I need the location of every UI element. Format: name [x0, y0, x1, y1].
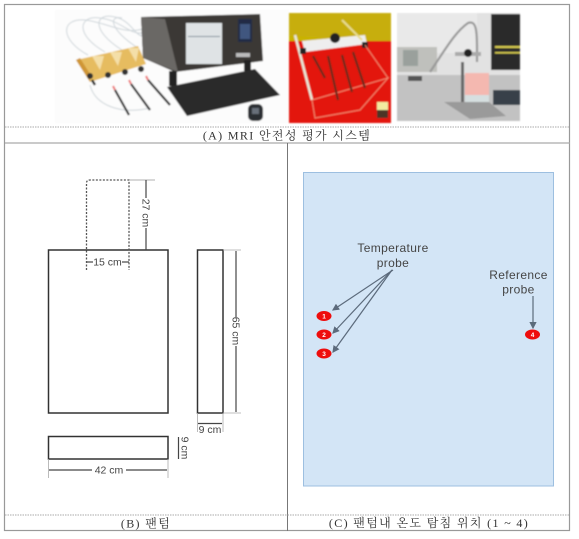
panel: phantom dimensions: [48, 180, 242, 478]
base: [444, 102, 506, 119]
gooseneck arm: [430, 22, 477, 72]
frame rails: [302, 35, 367, 52]
photo: phantom frame on red background: [289, 13, 391, 123]
caption A: (A) MRI 안전성 평가 시스템: [203, 128, 371, 142]
label: temperature probe: probe: [377, 256, 409, 270]
label: reference probe: probe: [502, 282, 535, 296]
marker 2: 2: [322, 332, 326, 339]
marker 4: [525, 330, 540, 340]
photo: MRI safety measurement console with probes: [55, 10, 289, 123]
panel: probe positions: [304, 172, 554, 486]
photo: probe stand with pink phantom beaker: [397, 13, 520, 121]
marker 1: [316, 311, 332, 321]
dimension 27 cm: [140, 180, 152, 250]
dimension 9 cm side: 9 cm: [199, 424, 222, 436]
caption B: (B) 팬텀: [121, 516, 171, 530]
marker 1: 1: [322, 314, 326, 320]
keyboard: [493, 90, 520, 105]
dimension 27 cm: 27 cm: [140, 199, 152, 228]
dimension 9 cm side: [198, 413, 223, 436]
dimension 15 cm: [87, 256, 129, 268]
dimension 65 cm: 65 cm: [230, 317, 242, 346]
arrow from reference probe: [532, 296, 534, 328]
label: reference probe: [489, 268, 548, 296]
probes: [115, 80, 170, 115]
arrows from temperature probe: [333, 270, 393, 352]
probe boxes: [76, 46, 146, 82]
marker 3: [316, 348, 332, 358]
dimension 42 cm: 42 cm: [95, 464, 124, 476]
clamp: [455, 52, 481, 56]
marker 2: [316, 330, 332, 340]
beaker: [465, 73, 489, 95]
dotted inset: [86, 180, 129, 270]
front view: [48, 250, 168, 413]
acrylic box outline: [312, 45, 388, 118]
background instrument: [397, 47, 437, 72]
label: temperature probe: [357, 241, 429, 270]
cables: [67, 16, 150, 110]
probes in phantom: [313, 52, 365, 100]
marker 4: 4: [531, 332, 535, 339]
keyboard: [167, 69, 280, 116]
monitor: [491, 14, 520, 70]
side view: [198, 250, 223, 413]
console: [141, 14, 263, 72]
marker 3: 3: [322, 351, 326, 358]
dimension 42 cm: [48, 459, 168, 478]
dimension 9 cm bottom: 9 cm: [178, 437, 190, 460]
label: temperature probe: Temperature: [357, 241, 429, 255]
label: reference probe: Reference: [489, 268, 548, 282]
dimension 15 cm: 15 cm: [93, 256, 122, 268]
bottom view: [48, 436, 168, 459]
caption C: (C) 팬텀내 온도 탐침 위치 (1 ~ 4): [329, 515, 529, 530]
